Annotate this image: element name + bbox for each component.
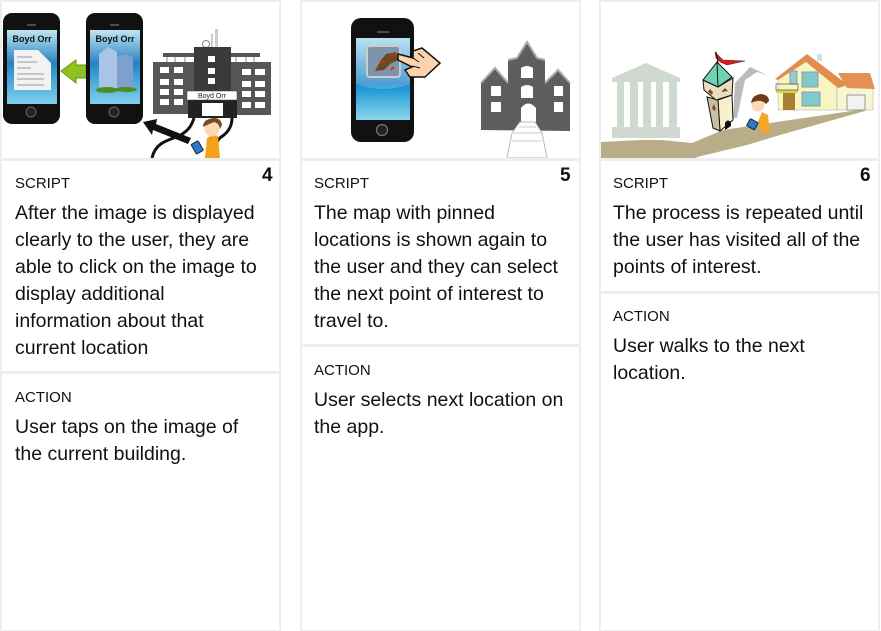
text: script body: the user has visited all of the: [613, 229, 860, 251]
panel: step 5 illustration: [302, 2, 579, 158]
icon: person with phone: [747, 94, 770, 134]
text: action body: the app.: [314, 416, 384, 438]
panel: step 5 script: [302, 161, 579, 344]
panel: step 4 action: [2, 374, 279, 630]
text: script body: the next point of interest to: [314, 283, 544, 305]
text: script body: display additional: [15, 283, 165, 305]
illustration: road: [601, 109, 865, 158]
text: script body: information about that: [15, 310, 204, 332]
text: action body: the current building.: [15, 443, 186, 465]
text: script body: The process is repeated until: [613, 202, 863, 224]
text: action body: [314, 389, 563, 438]
text: script body: the user and they can select: [314, 256, 558, 278]
text: action body: [613, 335, 805, 384]
text: action body: location.: [613, 362, 686, 384]
text: script body: [314, 202, 558, 332]
step number: 5: [560, 165, 571, 186]
icon: pointing hand: [398, 48, 440, 77]
text: action body: User taps on the image of: [15, 416, 238, 438]
text: script body: [15, 202, 257, 359]
icon: person with phone: [191, 118, 222, 158]
illustration: shadow mountain: [733, 67, 767, 118]
label: action: ACTION: [613, 308, 670, 325]
text: script body: points of interest.: [613, 256, 762, 278]
panel: step 5 action: [302, 347, 579, 630]
text: script body: clearly to the user, they are: [15, 229, 249, 251]
text: script body: able to click on the image to: [15, 256, 257, 278]
illustration: Boyd Orr building: [153, 29, 271, 118]
icon: green arrow: [61, 60, 86, 83]
path: winding route lines: [152, 118, 232, 158]
text: action body: User walks to the next: [613, 335, 805, 357]
column: step 5: [300, 0, 581, 631]
illustration: classical temple: [612, 63, 680, 138]
panel: step 4 illustration: [2, 2, 279, 158]
panel: step 6 illustration: [601, 2, 878, 158]
panel: step 6 action: [601, 294, 878, 630]
illustration: Boyd Orr building: Boyd Orr: [198, 93, 227, 100]
label: action: ACTION: [314, 362, 371, 379]
text: script body: [613, 202, 863, 278]
icon: left phone: [3, 13, 60, 124]
icon: right phone: [86, 13, 143, 124]
text: script body: The map with pinned: [314, 202, 495, 224]
arrow: black pointer to phone: [143, 119, 191, 144]
column: step 6: [599, 0, 880, 631]
label: action: ACTION: [15, 389, 72, 406]
label: script: SCRIPT: [15, 175, 70, 192]
step number: 6: [860, 165, 871, 186]
illustration: tower with flag: [703, 52, 745, 131]
panel: step 6 script: [601, 161, 878, 291]
illustration: house: [775, 54, 875, 110]
text: action body: [15, 416, 238, 465]
label: script: SCRIPT: [314, 175, 369, 192]
text: action body: User selects next location on: [314, 389, 563, 411]
label: script: SCRIPT: [613, 175, 668, 192]
icon: right phone: Boyd Orr: [95, 34, 135, 44]
text: script body: After the image is displayed: [15, 202, 255, 224]
step number: 4: [262, 165, 273, 186]
text: script body: current location: [15, 337, 148, 359]
panel: step 4 script: [2, 161, 279, 371]
text: script body: locations is shown again to: [314, 229, 547, 251]
icon: phone with map: [351, 18, 414, 142]
icon: left phone: Boyd Orr: [12, 34, 52, 44]
illustration: grey castle building: [481, 42, 570, 158]
column: step 4: [0, 0, 281, 631]
text: script body: travel to.: [314, 310, 389, 332]
